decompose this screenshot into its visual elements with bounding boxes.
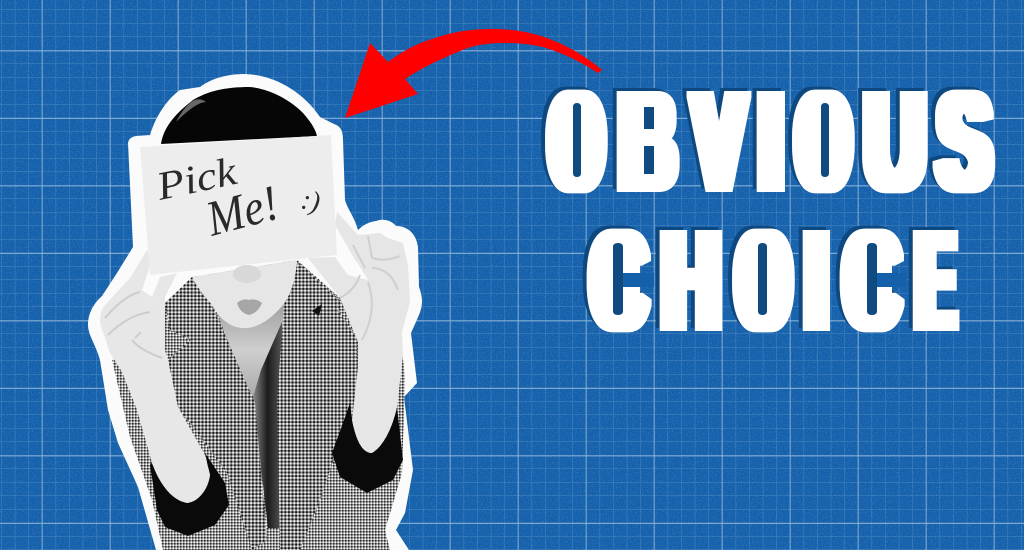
handwriting: Pick: Pick — [151, 148, 241, 209]
handwriting on sign — [151, 148, 323, 247]
handwriting: smiley: :) — [299, 184, 323, 218]
red curved arrow — [345, 29, 602, 118]
hair — [161, 87, 317, 144]
jacket — [112, 260, 405, 550]
title line 2: I — [806, 204, 827, 358]
right hand creases — [340, 236, 400, 340]
lips — [237, 299, 262, 315]
right arm and hand — [308, 212, 410, 453]
title line 2: O — [737, 204, 790, 358]
right cuff — [332, 403, 403, 493]
letter counter refinements — [560, 100, 906, 318]
left cuff — [150, 453, 229, 536]
title: OBVIOUS CHOICE — [550, 65, 990, 358]
person cut-out holding sign — [88, 74, 422, 550]
handwriting: Me!: Me! — [199, 174, 284, 247]
left arm and hand — [100, 250, 210, 503]
title line 1: I — [759, 65, 783, 219]
face — [192, 260, 297, 328]
hair highlight — [176, 99, 206, 122]
title line 2: H — [662, 204, 720, 358]
nose shadow — [233, 265, 261, 283]
neck and chest — [212, 300, 284, 400]
lapel notch shadow — [312, 304, 322, 316]
title line 1: V — [694, 65, 744, 219]
title line 1: O — [550, 65, 603, 219]
sign card — [140, 135, 337, 275]
title line 2: C — [845, 204, 899, 358]
title line 1: B — [620, 65, 675, 219]
left lapel — [165, 277, 267, 550]
title line 1: O — [797, 65, 850, 219]
left hand creases — [105, 292, 162, 358]
title line 1: U — [865, 65, 925, 219]
title line 2: C — [592, 204, 646, 358]
title: OBVIOUS CHOICE: E — [917, 204, 954, 358]
white sticker outline — [88, 74, 422, 550]
right lapel — [277, 262, 358, 550]
shirt — [253, 322, 282, 528]
